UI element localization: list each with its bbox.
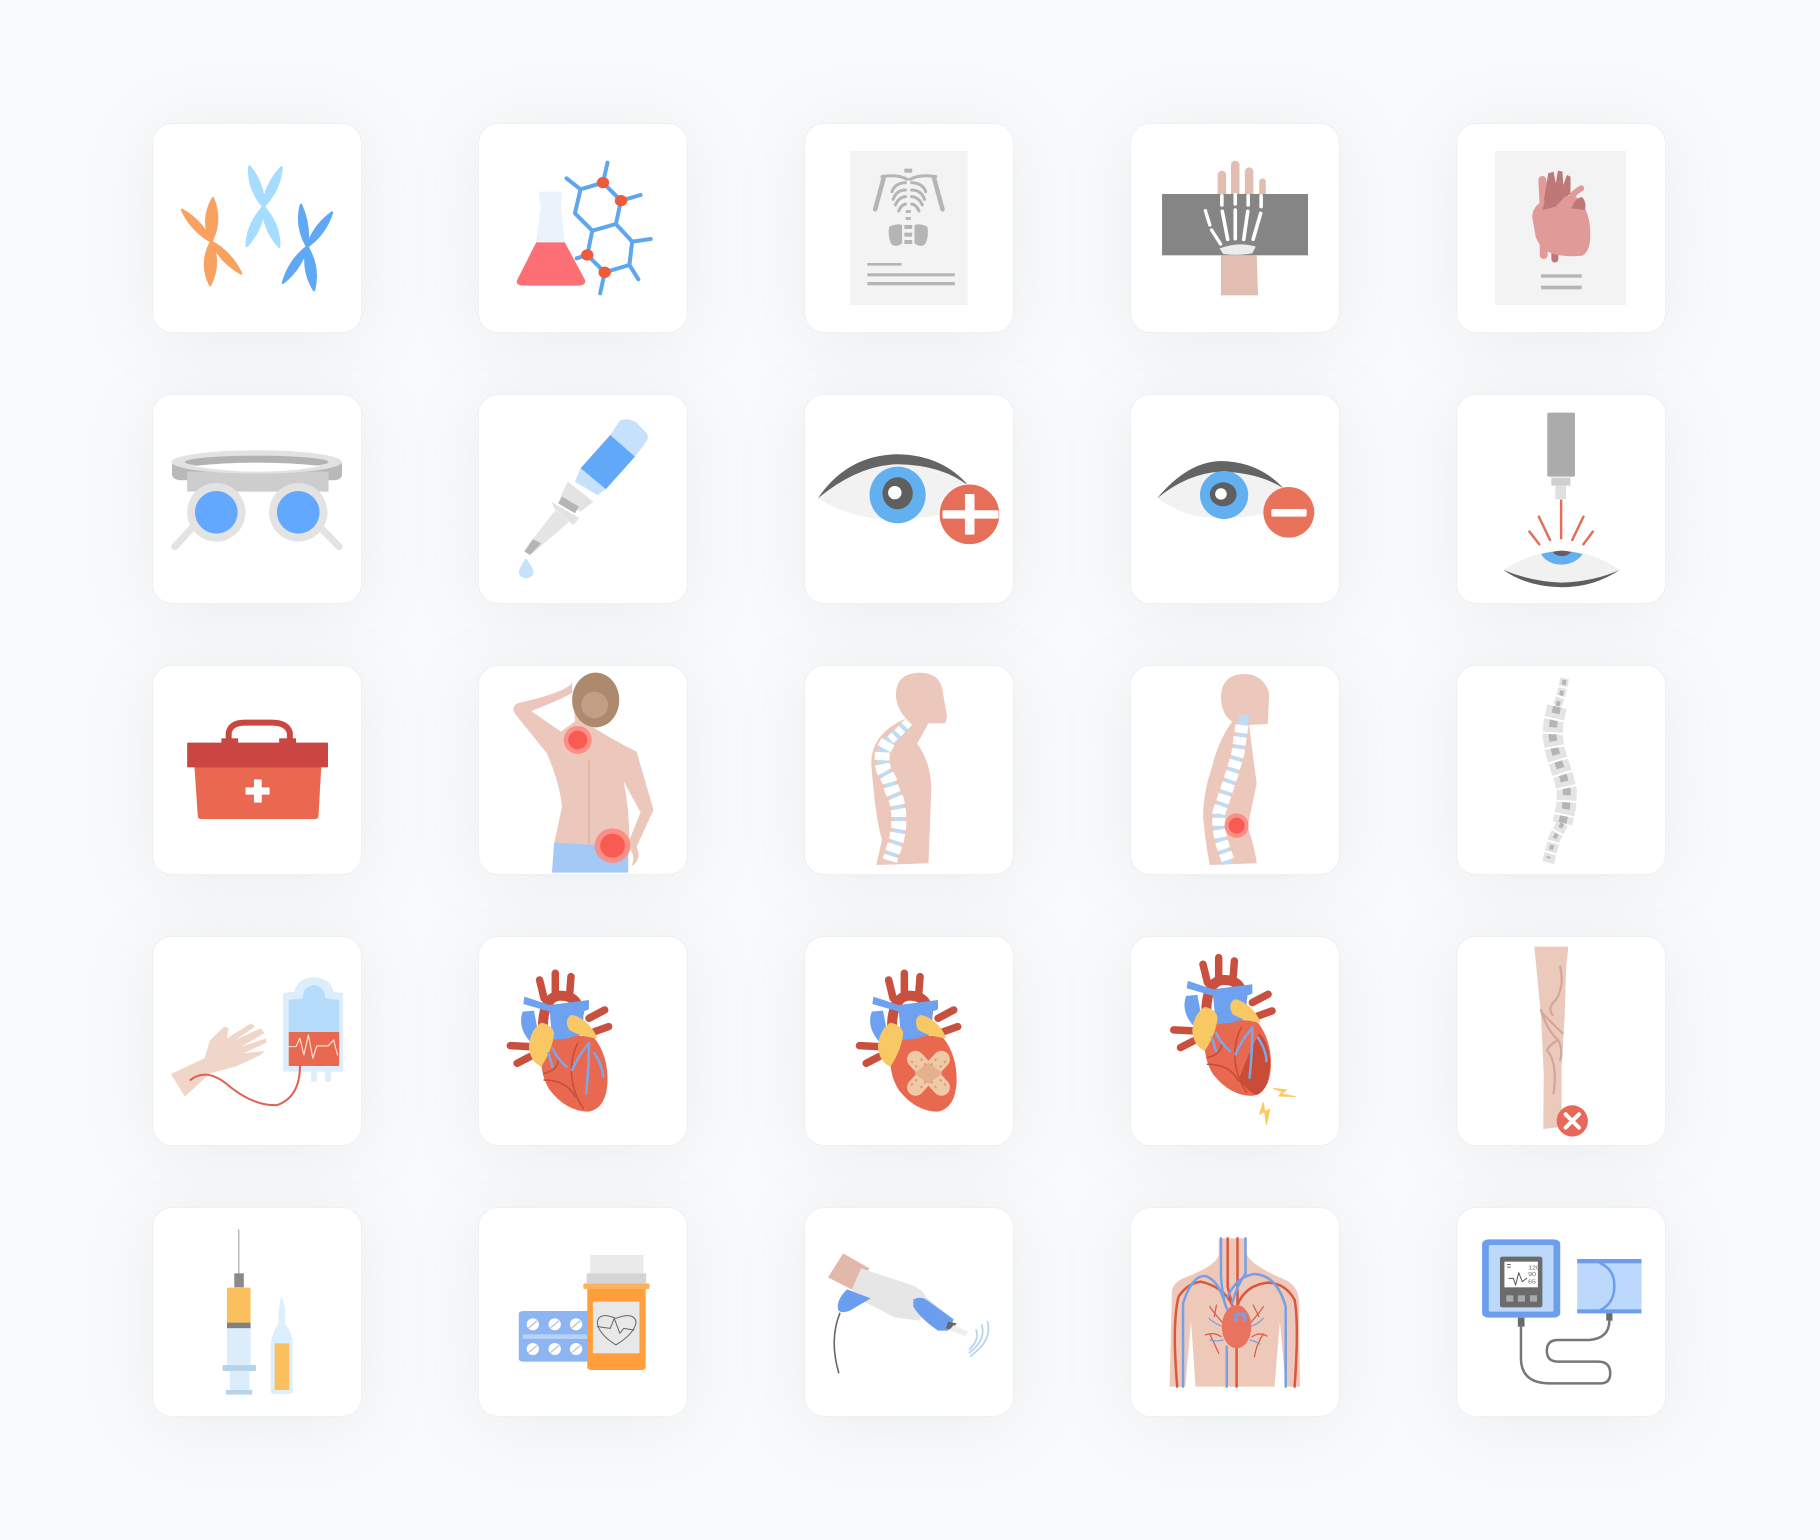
panel: bandaged heart card [804,936,1014,1146]
panel: first aid kit card [152,665,362,875]
icon: chromosomes [182,167,332,290]
panel: heart attack card [1130,936,1340,1146]
icon: blood pressure monitor: 120 [1528,1265,1541,1271]
icon: eye with plus [818,454,1000,545]
panel: curved spine profile card [804,665,1014,875]
icon: syringe and ampoule [222,1230,293,1395]
icon: flask and molecule [517,163,651,293]
panel: medication card [478,1207,688,1417]
icon: back pain figure [513,673,653,873]
panel: eye dropper card [478,394,688,604]
icon: blood pressure monitor: 90 [1528,1272,1537,1278]
panel: anatomical heart card [478,936,688,1146]
panel: syringe card [152,1207,362,1417]
panel: back pain card [478,665,688,875]
icon: anatomical heart [510,973,609,1112]
icon: heart with lightning [1174,958,1296,1125]
panel: blood pressure monitor card [1456,1207,1666,1417]
panel: heart poster card [1456,123,1666,333]
icon: hand x-ray [1162,165,1308,295]
icon: chest x-ray sheet [850,151,968,305]
icon: pill blister and bottle [519,1255,650,1370]
panel: trial frame card [152,394,362,604]
icon: heart poster [1495,151,1626,305]
panel: blood transfusion card [152,936,362,1146]
panel: circulatory system card [1130,1207,1340,1417]
icon: blood bag and hand [171,977,343,1105]
panel: eye plus card [804,394,1014,604]
panel: chest x-ray card [804,123,1014,333]
panel: hand x-ray card [1130,123,1340,333]
icon: blood pressure monitor [1482,1239,1641,1383]
panel: scoliosis spine card [1456,665,1666,875]
icon: blood pressure monitor: 65 [1528,1279,1537,1285]
icon: scoliosis spine [1548,678,1567,863]
panel: chromosomes card [152,123,362,333]
icon: trial frame glasses [171,450,342,547]
panel: ultrasound card [804,1207,1014,1417]
panel: lumbar pain spine card [1130,665,1340,875]
icon: laser eye surgery [1504,413,1620,587]
panel: laser eye surgery card [1456,394,1666,604]
icon: heart with bandage [859,973,958,1112]
icon: eye with minus [1157,461,1314,538]
icon: kyphosis spine profile [871,673,947,865]
icon: leg with varicose veins [1534,947,1588,1137]
icon: first aid kit [187,723,328,819]
icon: eye dropper [519,419,648,578]
panel: eye minus card [1130,394,1340,604]
icon: ultrasound probe in hand [828,1253,989,1373]
panel: varicose veins card [1456,936,1666,1146]
icon: spine profile with pain spot [1203,674,1269,865]
icon: circulatory system torso [1170,1238,1300,1387]
panel: flask and molecule card [478,123,688,333]
